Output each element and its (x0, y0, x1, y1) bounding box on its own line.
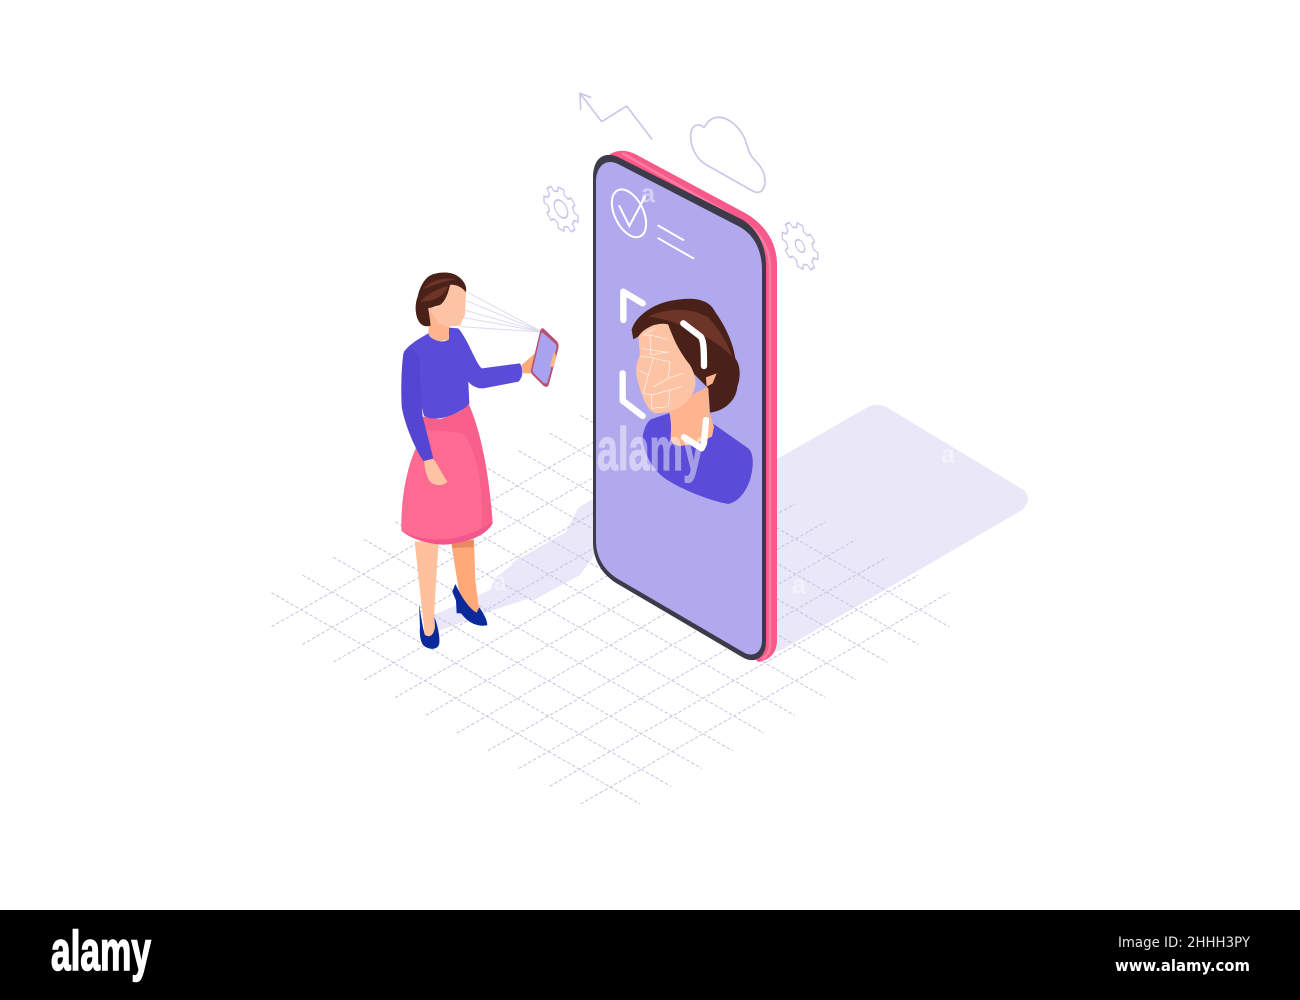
portrait hair (632, 299, 740, 413)
hair highlights (420, 279, 456, 302)
right shoe (452, 584, 487, 626)
portrait face (636, 324, 695, 413)
portrait hair highlights (648, 310, 733, 357)
woman figure (401, 273, 559, 649)
woman shadow (432, 497, 598, 632)
raising hand (522, 353, 535, 373)
footer site url: www.alamy.com (1115, 956, 1250, 975)
icon: cloud (691, 117, 765, 192)
right leg (451, 542, 479, 614)
portrait ear (706, 373, 717, 387)
gaze scan rays (460, 292, 542, 332)
face scan mesh (638, 328, 683, 408)
sweater torso (403, 328, 522, 419)
left shoe (419, 604, 439, 649)
check mark badge (605, 184, 693, 258)
left leg (415, 542, 439, 637)
small phone (531, 328, 559, 387)
back hand (424, 459, 448, 485)
phone screen (596, 162, 762, 655)
sweater sleeve (401, 349, 433, 461)
face (430, 284, 466, 327)
footer image id: Image ID: 2HHH3PY (1118, 935, 1250, 951)
isometric floor grid (272, 415, 949, 804)
footer bar (0, 910, 1300, 1000)
big phone shadow (768, 405, 1028, 652)
skirt hem (401, 523, 493, 545)
watermark: small marks (494, 178, 956, 599)
phone pink highlight (622, 153, 770, 659)
watermark: small marks: a (941, 439, 956, 469)
icon: right gear (782, 214, 818, 278)
phone dark bezel (593, 155, 766, 660)
portrait shoulders (642, 413, 753, 504)
skirt leg shadow (452, 539, 474, 548)
hair (416, 273, 466, 326)
portrait neck (668, 387, 714, 446)
scan frame corners (623, 292, 706, 448)
neck (428, 307, 449, 342)
watermark: small marks: a (792, 569, 807, 599)
icon: trend arrow (580, 93, 652, 139)
watermark: small marks: a (641, 178, 656, 208)
portrait on phone (623, 292, 753, 504)
skirt shading (423, 404, 493, 532)
phone pink side (600, 151, 777, 662)
watermark: small marks: a (494, 566, 506, 596)
skirt (401, 404, 493, 545)
watermark: large alamy: alamy (597, 416, 704, 483)
icon: left gear (544, 179, 578, 239)
large smartphone (593, 151, 777, 662)
footer logo: alamy (51, 919, 151, 982)
